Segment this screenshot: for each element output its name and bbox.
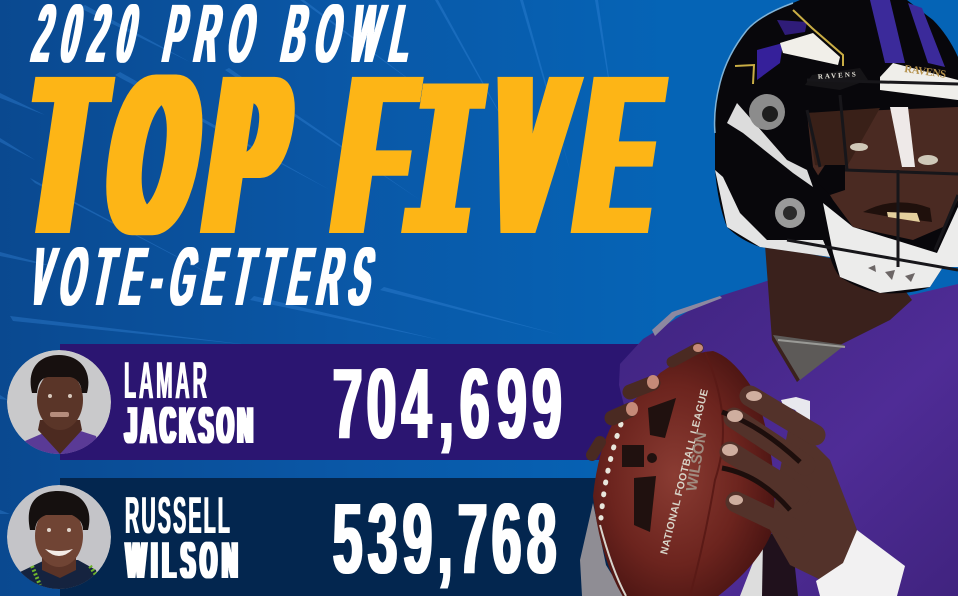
helmet lower trim	[715, 170, 830, 257]
ear hole upper	[749, 94, 785, 130]
bar: Lamar Jackson row	[60, 344, 660, 460]
eyes	[850, 143, 938, 165]
mouth	[863, 202, 932, 222]
helmet purple stripes	[870, 0, 945, 67]
raven logo	[735, 10, 843, 84]
right hand	[722, 396, 857, 582]
name: Lamar Jackson	[124, 352, 253, 455]
NFL shield	[781, 397, 810, 422]
visor stripe	[890, 107, 915, 167]
football text: NATIONAL FOOTBALL LEAGUE	[658, 388, 711, 556]
left hand fingers	[592, 348, 698, 455]
votes: 704,699: 704,699	[333, 348, 562, 459]
facemask	[787, 80, 958, 270]
football markings	[622, 398, 676, 532]
right nails	[722, 391, 762, 505]
name: Russell Wilson: RUSSELL	[125, 487, 230, 545]
bar: Russell Wilson row	[60, 478, 660, 596]
bracket text: RAVENS	[818, 70, 856, 81]
name: Russell Wilson: WILSON	[126, 532, 238, 590]
left nails	[626, 344, 703, 416]
votes: 539,768: 539,768	[333, 483, 556, 594]
laces	[601, 424, 621, 518]
wristband	[816, 530, 905, 596]
football	[593, 351, 775, 596]
subtitle: Vote-Getters: VOTE-GETTERS	[23, 230, 382, 323]
name: Lamar Jackson: LAMAR	[124, 352, 207, 410]
name: Russell Wilson	[125, 487, 238, 590]
name: Lamar Jackson: JACKSON	[125, 397, 253, 455]
chin guard	[823, 203, 958, 293]
visor bracket	[805, 68, 868, 90]
helmet shell	[715, 0, 958, 293]
helmet brand text: RAVENS	[904, 63, 947, 81]
face	[807, 107, 958, 240]
football brand: WILSON	[683, 431, 710, 493]
avatar: Lamar Jackson	[7, 350, 111, 456]
forehead bumper	[880, 63, 958, 100]
heading: Top Five: TOP FIVE	[11, 27, 672, 302]
avatar: Russell Wilson	[7, 485, 111, 592]
sleeve lower left	[580, 503, 625, 596]
side panels	[727, 103, 813, 187]
neck	[765, 245, 912, 382]
player photo: Lamar Jackson	[580, 0, 958, 596]
jersey	[619, 280, 958, 596]
ear hole lower	[775, 198, 805, 228]
